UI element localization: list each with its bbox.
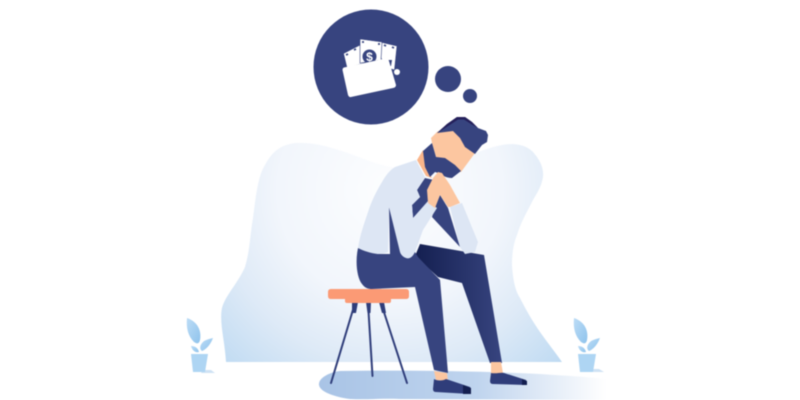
shirt bbox=[358, 160, 437, 258]
banknote left bbox=[344, 45, 364, 68]
neck bbox=[417, 150, 432, 178]
plant: left bbox=[187, 318, 215, 373]
man bbox=[357, 117, 527, 394]
torso collar bbox=[412, 178, 434, 218]
far foot bbox=[491, 362, 503, 375]
right leaves bbox=[574, 318, 587, 343]
near leg bbox=[357, 248, 448, 373]
banknote middle bbox=[360, 39, 382, 63]
left leaves bbox=[187, 318, 200, 343]
bubble: small circle bbox=[463, 89, 477, 103]
icon: wallet with banknotes: $ bbox=[366, 50, 373, 64]
clasped hands bbox=[427, 172, 460, 208]
thought bubble bbox=[314, 10, 477, 124]
torso side wedge bbox=[389, 207, 401, 254]
near shoe bbox=[433, 379, 471, 394]
face bbox=[431, 124, 475, 172]
ground shadow bbox=[319, 371, 606, 400]
near foot bbox=[434, 371, 448, 381]
background blob bbox=[221, 143, 562, 362]
wallet clasp bbox=[394, 69, 400, 75]
far shoe bbox=[490, 373, 526, 385]
stool bbox=[328, 289, 409, 383]
right sleeve bbox=[450, 203, 478, 254]
right pot bbox=[578, 354, 596, 372]
hair bbox=[437, 117, 488, 154]
stool legs bbox=[331, 303, 407, 383]
wallet body bbox=[342, 58, 396, 97]
right shadow bbox=[589, 369, 604, 372]
far leg bbox=[415, 244, 502, 363]
bubble: medium circle bbox=[435, 66, 461, 92]
stool seat bbox=[328, 289, 409, 303]
beard bbox=[423, 143, 461, 178]
bubble: large circle bbox=[314, 10, 428, 124]
plant: right bbox=[574, 318, 604, 372]
torso below hands bbox=[432, 195, 460, 247]
left pot bbox=[191, 354, 208, 372]
banknote right bbox=[380, 42, 397, 70]
left shadow bbox=[201, 370, 215, 373]
icon: wallet with banknotes bbox=[342, 39, 400, 97]
